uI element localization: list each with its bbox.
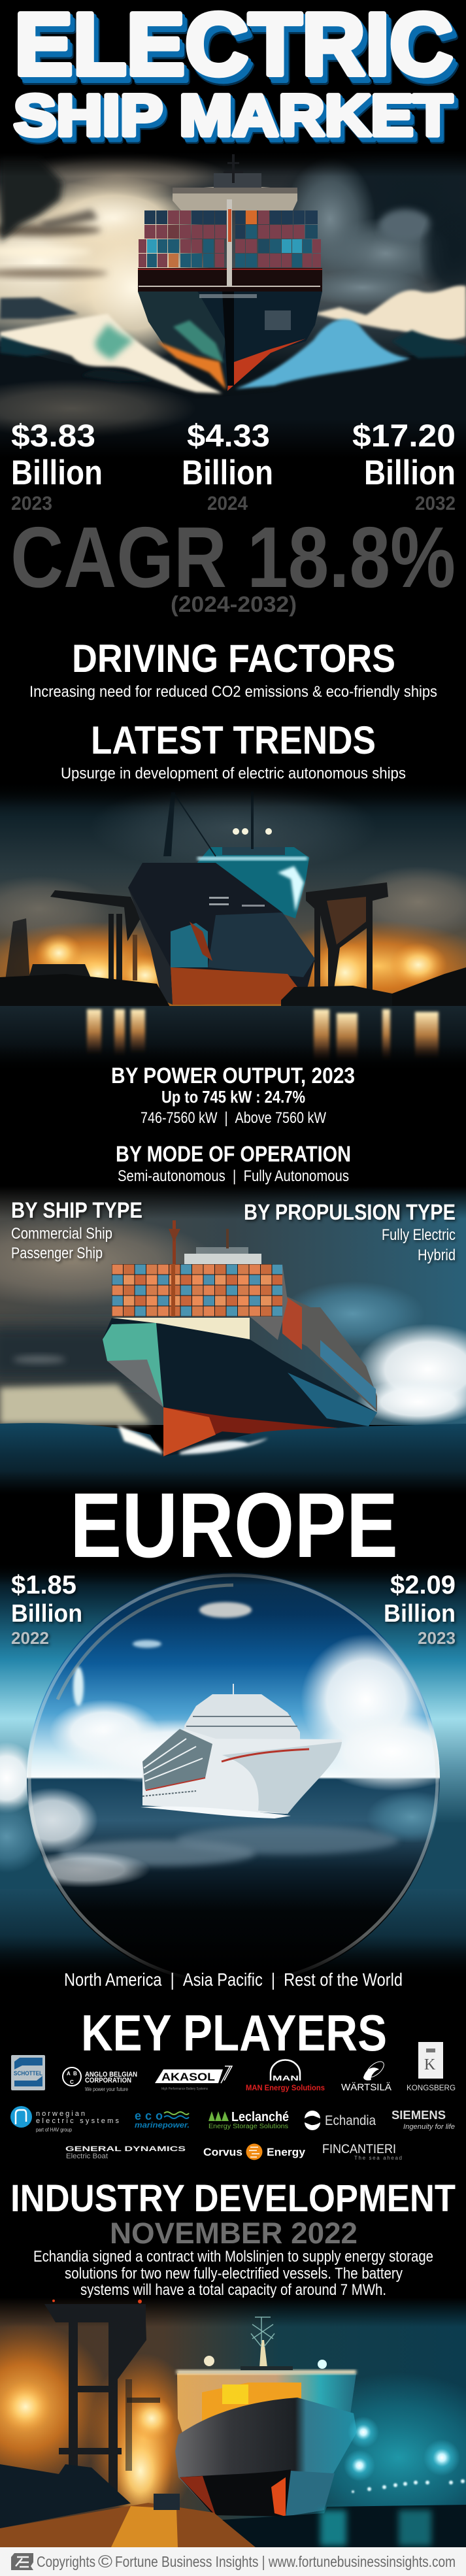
- heading: driving factors: DRIVING FACTORS: [72, 637, 395, 680]
- bridge superstructure: [173, 187, 297, 210]
- development description: systems will have a total capacity of around 7 MWh.: [80, 2281, 386, 2299]
- segment: by power output: Up to 745 kW : 24.7%: [161, 1087, 305, 1107]
- logo: Akasol: AKASOL: [161, 2071, 215, 2083]
- stat: 2032 market size: [352, 419, 456, 514]
- segment: by power output: 746-7560 kW | Above 7560 kW: [141, 1109, 326, 1127]
- logo: Fincantieri: FINCANTIERI: [322, 2143, 396, 2156]
- title line 2: SHIP MARKET: [16, 84, 454, 150]
- image: cruise ship inside glass globe: [0, 1562, 466, 1986]
- stat: 2024 market size: Billion: [182, 454, 273, 492]
- date: November 2022: NOVEMBER 2022: [110, 2216, 358, 2250]
- title line 1: ELECTRIC: [19, 1, 458, 99]
- segment: by power output: [111, 1063, 355, 1127]
- logo: Leclanche: Energy Storage Solutions: [208, 2123, 288, 2130]
- logo: Anglo Belgian Corporation: [63, 2067, 137, 2092]
- logo: Leclanche: Leclanché: [231, 2110, 289, 2124]
- foremast: [227, 199, 232, 286]
- logo: Anglo Belgian Corporation: ANGLO BELGIAN: [85, 2071, 137, 2079]
- stat: Europe 2022: $1.85: [11, 1571, 76, 1599]
- logo: Corvus Energy: Corvus: [203, 2146, 242, 2158]
- clouds on water: [176, 1826, 399, 1854]
- stat: Europe 2023: [384, 1571, 456, 1648]
- quay road: [0, 2503, 256, 2547]
- right bow wave: [314, 286, 466, 340]
- logo: Kongsberg: K: [424, 2056, 436, 2073]
- logo: Anglo Belgian Corporation: C: [70, 2079, 74, 2085]
- water: [222, 2505, 466, 2547]
- segment: by ship type: Commercial Ship: [11, 1225, 112, 1243]
- stat: Europe 2022: [11, 1571, 82, 1648]
- logo: Norwegian Electric Systems: electric systems: [36, 2117, 120, 2125]
- ship hull: [128, 863, 315, 1005]
- other regions: North America | Asia Pacific | Rest of the World: [64, 1969, 403, 1990]
- title line 2: SHIP MARKET: [18, 88, 457, 154]
- heading: key players: KEY PLAYERS: [81, 2004, 387, 2062]
- logo: Kongsberg: KONGSBERG: [407, 2083, 456, 2092]
- left horizon band: [0, 297, 78, 319]
- globe: [27, 1573, 440, 1977]
- ship mast: [204, 2317, 327, 2369]
- copyright text: [37, 2552, 456, 2571]
- segment: by ship type: [11, 1198, 142, 1262]
- segment: by propulsion type: [244, 1200, 456, 1264]
- red antifouling: [163, 1407, 348, 1456]
- logo: Anglo Belgian Corporation: CORPORATION: [85, 2077, 131, 2084]
- logo: Norwegian Electric Systems: [10, 2106, 120, 2133]
- hero image: container ship in stormy sea: [0, 154, 466, 444]
- fence and cargo: [0, 2464, 131, 2528]
- segment: by mode of operation: [116, 1142, 351, 1185]
- logo: Echandia: Echandia: [325, 2113, 376, 2128]
- stat: 2032 market size: $17.20: [352, 419, 456, 454]
- stat: 2024 market size: 2024: [207, 493, 248, 514]
- lights: [348, 2417, 379, 2448]
- logo: MAN Energy Solutions: [246, 2060, 325, 2092]
- side container stack: [282, 1294, 377, 1412]
- segment: by mode of operation: BY MODE OF OPERATION: [116, 1142, 351, 1167]
- gantry crane: [44, 2304, 160, 2492]
- stat: 2024 market size: [182, 419, 273, 514]
- logo: Anglo Belgian Corporation: We power your future: [85, 2086, 128, 2092]
- logo: Eco Marine Power: [135, 2109, 190, 2130]
- logo: Eco Marine Power: eco: [135, 2109, 163, 2122]
- stat: 2024 market size: $4.33: [187, 419, 270, 454]
- title line 2: SHIP MARKET: [14, 82, 452, 148]
- tugs and quay: [281, 986, 392, 1007]
- right gantry crane: [306, 882, 388, 994]
- logo: Wartsila: WÄRTSILÄ: [341, 2082, 391, 2093]
- latest trends text: Upsurge in development of electric autonomous ships: [61, 765, 406, 782]
- logo: Siemens: SIEMENS: [391, 2109, 446, 2122]
- stat: Europe 2022: 2022: [11, 1628, 49, 1648]
- stat: 2023 market size: [11, 419, 103, 514]
- ship superstructure: [177, 2373, 356, 2432]
- CAGR period: (2024-2032): [171, 592, 297, 617]
- segment: by propulsion type: Hybrid: [418, 1246, 456, 1264]
- logo: General Dynamics Electric Boat: Electric Boat: [66, 2152, 108, 2160]
- logo: Leclanche: [208, 2110, 289, 2130]
- heading: latest trends: LATEST TRENDS: [91, 718, 376, 762]
- segment: by ship type: BY SHIP TYPE: [11, 1198, 142, 1223]
- segment: by mode of operation: Semi-autonomous | Fully Autonomous: [118, 1167, 349, 1185]
- copyright text: Copyrights: [37, 2553, 95, 2570]
- logo: Akasol: High Performance Battery Systems: [161, 2087, 208, 2091]
- logo: Fincantieri: The sea ahead: [354, 2155, 402, 2161]
- ship superstructure: [196, 847, 309, 918]
- segment: by power output: BY POWER OUTPUT, 2023: [111, 1063, 355, 1088]
- bridge: [184, 1254, 261, 1264]
- stat: 2023 market size: Billion: [11, 454, 103, 492]
- stat: Europe 2022: Billion: [11, 1600, 82, 1628]
- logo: Norwegian Electric Systems: norwegian: [36, 2110, 85, 2118]
- image: ship at dock with gantry cranes: [0, 781, 466, 1075]
- title line 2: SHIP MARKET: [18, 87, 456, 152]
- copyright text: ©: [98, 2552, 112, 2571]
- logo: Akasol: [155, 2066, 232, 2091]
- footer logo: [11, 2553, 33, 2570]
- ship hull: [138, 292, 322, 391]
- stat: Europe 2023: 2023: [418, 1628, 456, 1648]
- stat: 2023 market size: 2023: [11, 493, 52, 514]
- left gantry crane: [5, 890, 141, 987]
- logo: Schottel: [11, 2055, 45, 2090]
- logo: Siemens: Ingenuity for life: [403, 2123, 455, 2131]
- segment: by ship type: Passenger Ship: [11, 1245, 103, 1262]
- footer copyright bar: [0, 2547, 466, 2576]
- container stack: [139, 210, 321, 267]
- stat: 2032 market size: 2032: [415, 493, 456, 514]
- logo: Norwegian Electric Systems: part of HAV group: [36, 2127, 72, 2133]
- logo: General Dynamics Electric Boat: GENERAL DYNAMICS: [65, 2145, 186, 2153]
- stat: Europe 2023: Billion: [384, 1600, 456, 1628]
- ship hull: [175, 2398, 357, 2517]
- ship deck: [138, 268, 322, 292]
- logo: MAN Energy Solutions: MAN Energy Solutions: [246, 2083, 325, 2092]
- development description: [33, 2248, 433, 2299]
- logo: Anglo Belgian Corporation: B: [73, 2071, 77, 2077]
- logo: Wartsila: [341, 2059, 391, 2093]
- logo: Corvus Energy: Energy: [267, 2146, 306, 2158]
- front container stack: [112, 1264, 282, 1316]
- left bow wave: [0, 314, 222, 393]
- image: ship at port at night: [0, 2298, 466, 2547]
- sea: [0, 346, 466, 361]
- sea: [0, 1423, 466, 1489]
- title line 1: ELECTRIC: [17, 0, 456, 96]
- title line 1: ELECTRIC: [20, 2, 458, 101]
- logo: Kongsberg: [407, 2042, 456, 2092]
- heading: Europe: EUROPE: [70, 1473, 398, 1577]
- logo: Anglo Belgian Corporation: A: [67, 2071, 71, 2077]
- logo: MAN Energy Solutions: MAN: [273, 2075, 299, 2083]
- driving factors text: Increasing need for reduced CO2 emissions & eco-friendly ships: [29, 683, 437, 701]
- logo: Siemens: [391, 2109, 455, 2131]
- logo: Echandia: [305, 2111, 376, 2130]
- stat: 2023 market size: $3.83: [11, 419, 95, 454]
- image: container ship side view in heavy sea: [0, 1186, 466, 1497]
- logo: General Dynamics Electric Boat: [65, 2145, 186, 2160]
- development description: solutions for two new fully-electrified vessels. The battery: [65, 2265, 403, 2283]
- logo: Eco Marine Power: marinepower.: [135, 2120, 190, 2130]
- logo: Corvus Energy: [203, 2144, 306, 2160]
- title: Electric Ship Market: [14, 0, 458, 154]
- cruise ship: [141, 1684, 342, 1818]
- water reflections: [0, 1006, 466, 1056]
- hull: [103, 1318, 377, 1456]
- logo: Schottel: SCHOTTEL: [14, 2070, 42, 2077]
- stat: Europe 2023: $2.09: [390, 1571, 456, 1599]
